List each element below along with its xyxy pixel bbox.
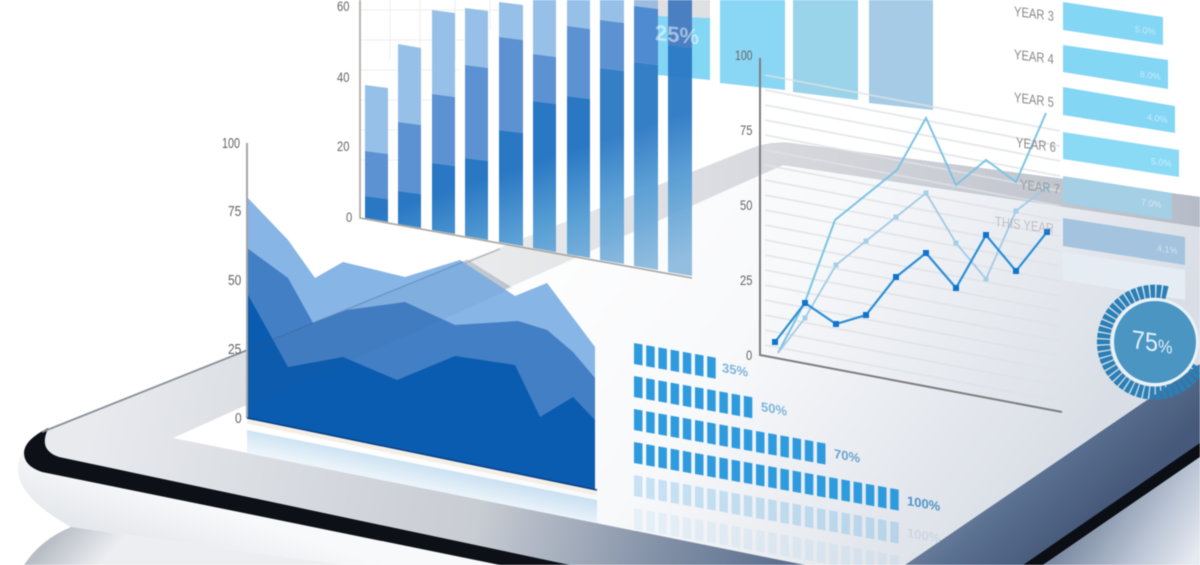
bar year 3 xyxy=(1063,2,1163,45)
bar values: 4.1% xyxy=(1157,243,1177,256)
axis labels: 40 xyxy=(337,70,349,85)
tablet band seen through chart xyxy=(247,260,513,407)
label 35: 35% xyxy=(722,360,748,380)
year labels: YEAR 6 xyxy=(1016,134,1056,155)
bar values: 5.0% xyxy=(1151,156,1171,169)
yearly horizontal bars xyxy=(995,2,1185,300)
axis labels: 75 xyxy=(740,123,752,138)
year labels: YEAR 7 xyxy=(1020,176,1060,197)
axis labels xyxy=(222,134,242,426)
bar this year xyxy=(1063,218,1185,265)
progress 70 xyxy=(634,420,829,455)
axis labels: 20 xyxy=(337,139,349,154)
bar 4 xyxy=(465,8,488,240)
reflection label: 100% xyxy=(907,525,941,546)
bar reflection xyxy=(1063,252,1185,300)
gauge value: 75% xyxy=(1132,326,1172,360)
line chart xyxy=(735,48,1062,412)
series pale line xyxy=(778,113,1046,353)
reflection rows lower xyxy=(634,518,901,565)
segmented progress bars xyxy=(634,354,941,565)
axes xyxy=(760,58,1062,412)
bar 5 xyxy=(499,2,523,246)
area chart xyxy=(222,134,597,523)
bar year 7 xyxy=(1063,176,1172,220)
area layer light xyxy=(247,197,595,490)
axis labels: 50 xyxy=(228,272,242,288)
year labels xyxy=(995,3,1060,237)
progress 50 xyxy=(634,386,756,408)
year labels: YEAR 3 xyxy=(1014,3,1054,24)
axis labels xyxy=(735,48,753,363)
reflection rows xyxy=(634,486,901,534)
donut gauge 75 percent xyxy=(1103,291,1199,393)
axis labels: 100 xyxy=(222,134,240,151)
year labels: YEAR 4 xyxy=(1014,46,1054,67)
bar 6 xyxy=(533,0,556,252)
tablet device xyxy=(18,143,1200,565)
axes xyxy=(246,143,248,418)
bar 3 xyxy=(432,10,455,234)
area layer mid xyxy=(247,248,595,490)
bar 1 xyxy=(365,85,388,222)
series light line xyxy=(778,184,1050,353)
bar year 5 xyxy=(1063,87,1175,133)
axis labels: 0 xyxy=(235,410,242,426)
bar year 6 xyxy=(1063,132,1179,177)
bar 8 xyxy=(600,0,624,264)
top blue bar chart segment xyxy=(658,0,933,110)
area layer dark xyxy=(247,293,595,490)
bar values: 7.0% xyxy=(1141,197,1161,210)
bar values: 8.0% xyxy=(1140,69,1160,82)
bar values: 5.0% xyxy=(1135,24,1155,37)
axes xyxy=(360,0,692,278)
stacked bar chart xyxy=(337,0,692,278)
series dark line xyxy=(772,229,1050,345)
bar value: 25% xyxy=(655,20,699,49)
axis labels: 0 xyxy=(746,348,752,363)
axis labels: 25 xyxy=(228,341,241,357)
bar 7 xyxy=(567,0,590,258)
label 70: 70% xyxy=(834,446,860,466)
bar 2 xyxy=(398,44,421,228)
axis labels: 75 xyxy=(228,203,241,219)
bar values: 4.0% xyxy=(1147,112,1167,125)
label 50: 50% xyxy=(761,399,787,419)
label 100: 100% xyxy=(907,493,941,514)
axis labels: 0 xyxy=(346,210,352,225)
bar values xyxy=(1135,24,1177,256)
progress 35 xyxy=(634,354,719,369)
progress 100 xyxy=(634,452,901,501)
axis labels: 50 xyxy=(740,198,752,213)
chart reflection xyxy=(247,430,597,523)
axis labels: 100 xyxy=(735,48,753,63)
chart grid xyxy=(765,75,1060,401)
year labels: THIS YEAR xyxy=(995,213,1054,237)
bar 10 xyxy=(668,0,692,276)
chart grid xyxy=(360,0,500,160)
axis labels xyxy=(337,0,352,225)
axis labels: 25 xyxy=(740,273,752,288)
bar year 4 xyxy=(1063,45,1168,89)
year labels: YEAR 5 xyxy=(1014,89,1054,110)
bar 9 xyxy=(634,0,658,270)
